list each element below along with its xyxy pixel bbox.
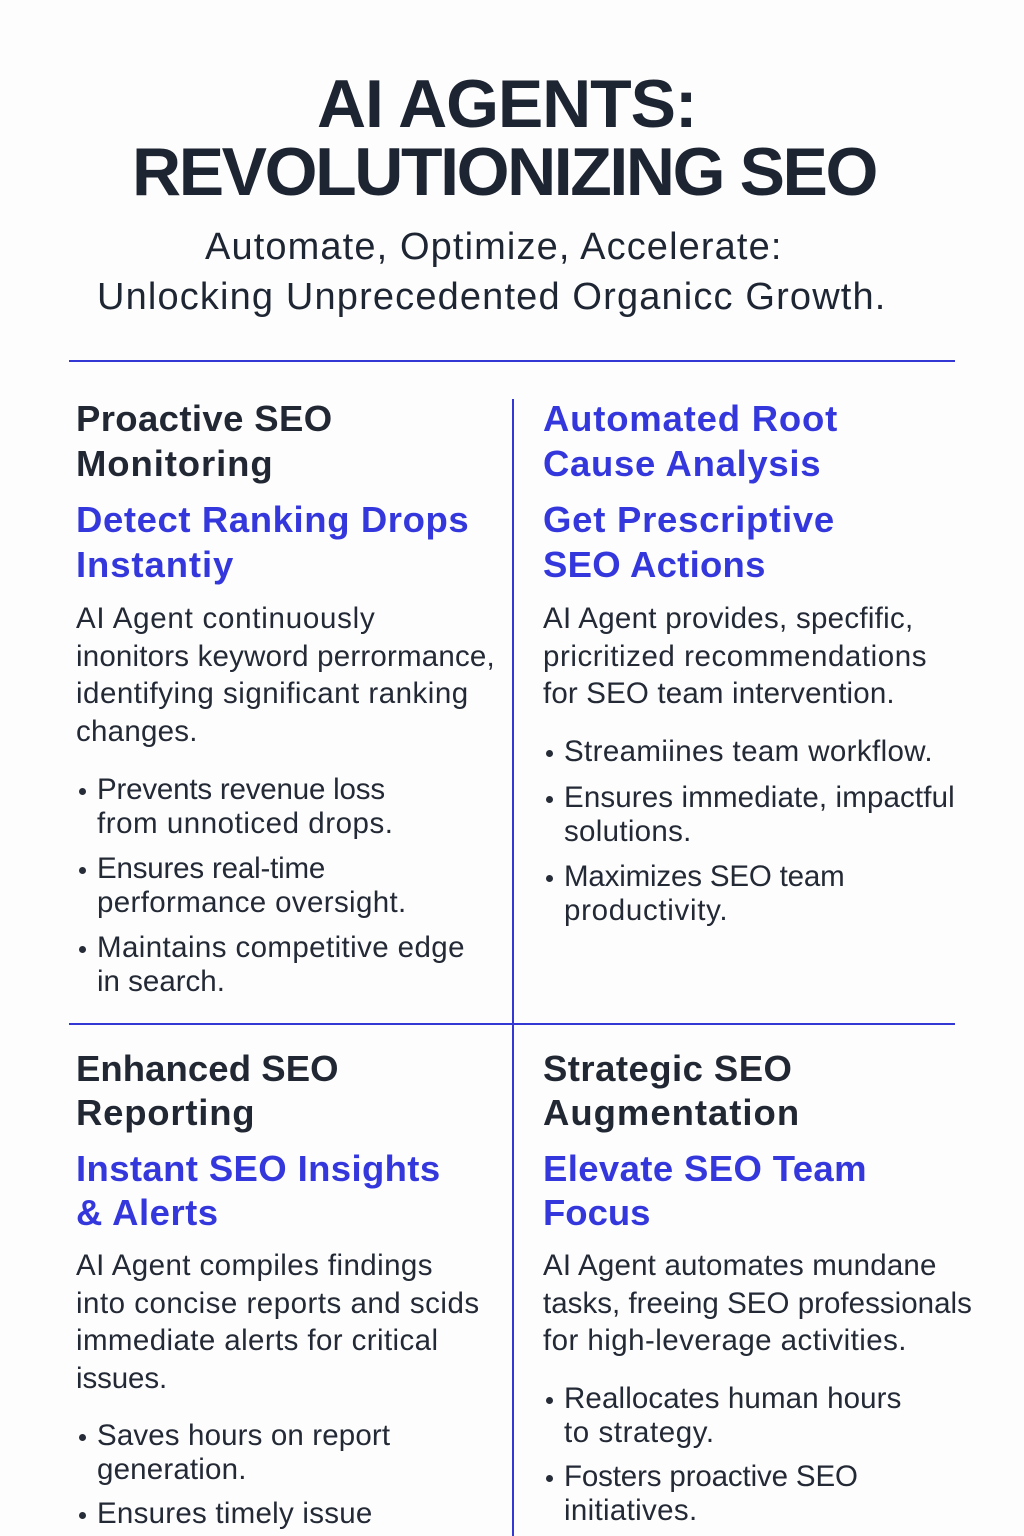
subheading: prescriptive actions: Get Prescriptive	[543, 499, 835, 540]
description	[543, 1249, 972, 1357]
bullet 3: Maximizes SEO team	[564, 860, 845, 893]
bullet list	[546, 1382, 902, 1527]
heading: enhanced SEO reporting	[76, 1048, 339, 1132]
heading: enhanced SEO reporting: Enhanced SEO	[76, 1048, 339, 1088]
bullet 2: performance oversight.	[97, 886, 407, 919]
description: AI Agent automates mundane	[543, 1249, 937, 1282]
subtitle	[97, 226, 886, 318]
description: pricritized recommendations	[543, 640, 927, 673]
description	[543, 602, 927, 710]
subheading: detect ranking drops: Instantiy	[76, 544, 234, 584]
title: AI AGENTS:	[317, 66, 696, 142]
heading: proactive SEO monitoring: Proactive SEO	[76, 398, 333, 439]
subtitle: Automate, Optimize, Accelerate:	[205, 226, 783, 268]
bullet 3: in search.	[97, 965, 225, 998]
bullet 1: from unnoticed drops.	[97, 807, 393, 840]
bullet 3: productivity.	[564, 894, 728, 927]
bullet 2	[79, 852, 407, 919]
subtitle: Unlocking Unprecedented Organicc Growth.	[97, 276, 886, 318]
subheading: elevate team focus: Focus	[543, 1192, 650, 1232]
heading: automated root cause analysis: Automated Root	[543, 398, 838, 439]
bullet 3	[546, 860, 845, 927]
subheading: instant insights	[76, 1148, 441, 1232]
description: into concise reports and scids	[76, 1287, 480, 1320]
bullet 2: Ensures immediate, impactful	[564, 781, 955, 814]
description: changes.	[76, 715, 198, 748]
heading: strategic SEO augmentation	[543, 1048, 800, 1132]
panel: enhanced SEO reporting	[76, 1048, 480, 1530]
panel: automated root cause analysis	[543, 398, 955, 927]
horizontal divider	[69, 1023, 955, 1025]
bullet 2	[546, 781, 955, 848]
bullet 1: to strategy.	[564, 1416, 715, 1448]
heading: strategic SEO augmentation: Strategic SEO	[543, 1048, 792, 1088]
bullet list	[79, 773, 465, 998]
subheading: instant insights: Instant SEO Insights	[76, 1148, 441, 1188]
bullet 1: Reallocates human hours	[564, 1382, 902, 1415]
bullet list	[546, 735, 955, 927]
description: tasks, freeing SEO professionals	[543, 1287, 972, 1320]
bullet 2: solutions.	[564, 815, 692, 848]
bullet 2: Fosters proactive SEO	[564, 1460, 858, 1493]
bullet 1: Prevents revenue loss	[97, 773, 385, 806]
description: inonitors keyword perrormance,	[76, 640, 495, 673]
panel: strategic SEO augmentation	[543, 1048, 972, 1527]
bullet 3	[79, 931, 465, 998]
heading: strategic SEO augmentation: Augmentation	[543, 1092, 800, 1132]
description: for high-leverage activities.	[543, 1324, 907, 1357]
bullet 2: initiatives.	[564, 1494, 697, 1527]
subheading: instant insights: & Alerts	[76, 1192, 219, 1232]
subheading: elevate team focus	[543, 1148, 867, 1232]
subheading: detect ranking drops	[76, 499, 469, 584]
heading: automated root cause analysis	[543, 398, 838, 484]
heading: proactive SEO monitoring	[76, 398, 333, 484]
subheading: detect ranking drops: Detect Ranking Drops	[76, 499, 469, 540]
subheading: prescriptive actions: SEO Actions	[543, 544, 766, 584]
description: for SEO team intervention.	[543, 677, 895, 710]
bullet 1: generation.	[97, 1452, 247, 1486]
title: REVOLUTIONIZING SEO	[132, 134, 876, 210]
bullet 1	[79, 773, 393, 840]
bullet list	[79, 1419, 390, 1530]
bullet 1	[79, 1419, 390, 1486]
bullet 3: Maintains competitive edge	[97, 931, 465, 964]
panel: proactive SEO monitoring	[76, 398, 495, 998]
heading: proactive SEO monitoring: Monitoring	[76, 442, 274, 484]
header divider	[69, 360, 955, 362]
vertical divider	[512, 399, 514, 1536]
description: AI Agent provides, specfific,	[543, 602, 914, 635]
bullet 1	[546, 1382, 902, 1448]
description	[76, 1249, 480, 1395]
description: issues.	[76, 1362, 167, 1395]
bullet 1: Streamiines team workflow.	[564, 735, 933, 768]
description: AI Agent continuously	[76, 602, 375, 635]
description: immediate alerts for critical	[76, 1324, 438, 1357]
bullet 2: Ensures timely issue	[97, 1497, 373, 1530]
description	[76, 602, 495, 748]
title	[132, 66, 876, 210]
bullet 1: Saves hours on report	[97, 1419, 390, 1452]
bullet 2: Ensures real-time	[97, 852, 325, 885]
description: AI Agent compiles findings	[76, 1249, 433, 1282]
heading: automated root cause analysis: Cause Analysis	[543, 442, 821, 484]
bullet 2	[546, 1460, 858, 1527]
heading: enhanced SEO reporting: Reporting	[76, 1092, 255, 1132]
subheading: prescriptive actions	[543, 499, 835, 584]
subheading: elevate team focus: Elevate SEO Team	[543, 1148, 867, 1188]
description: identifying significant ranking	[76, 677, 469, 710]
